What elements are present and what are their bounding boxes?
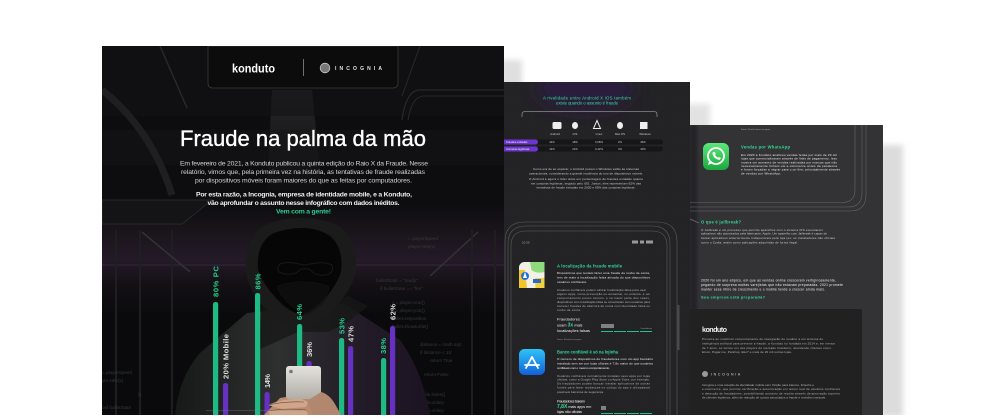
table: fraud by operating system: Mac OS [615, 132, 625, 136]
background: server corridor: return True [430, 358, 453, 363]
Incognia logo and text: e-commerce, que permite verificação e autenticação em tempo real de usuários confiáveis [702, 387, 840, 391]
table: fraud by operating system: 21% [572, 147, 578, 151]
section: fake locations: comportamento pouco comum, e na maior parte dos casos, [557, 296, 650, 300]
table: fraud by operating system: 36% [640, 140, 646, 144]
Konduto logo and text: Elomi, Pagar.me, Petshop, Eko? e mais de 20 mil outras lojas. [702, 350, 792, 354]
highlighted text: Por esta razão, a Incognia, empresa de identidade mobile, e a Konduto, [196, 192, 412, 198]
section: trusted bank: 7,8X mais apps em [557, 404, 591, 410]
header: logos: INCOGNIA [335, 66, 382, 72]
section: trusted bank: O número de dispositivos de fraudadores com um app bancário [557, 357, 653, 361]
background: server corridor: bulletState = "ready" [376, 278, 418, 283]
section: WhatsApp sales: de vendas por WhatsApp. [741, 172, 781, 176]
heading: rivalry: existe quando o assunto é fraude [556, 100, 619, 106]
bar labels: 14% [263, 374, 272, 388]
icon: app store [519, 349, 545, 375]
section: WhatsApp sales: Em 2020 a Konduto analisou vendas feitas por mais de 20 mil [741, 153, 837, 157]
background: server corridor: = playerSpeed [408, 236, 438, 241]
section: trusted bank: Usuários confiáveis normalmente instalam seus apps por lojas [557, 374, 651, 378]
Incognia logo and text: e detecção de fraudadores, possibilitando aumento de receita através da aprovação superior [702, 392, 840, 396]
section: fake locations: dispositivos com localização falsa se conectaram com usuários para [557, 300, 650, 304]
bar labels: 53% [338, 318, 346, 334]
bar labels: 62% [388, 304, 398, 320]
table: fraud by operating system: 41% [549, 147, 555, 151]
section: WhatsApp sales: Vendas por WhatsApp [741, 144, 790, 150]
bar labels: 36% [305, 342, 314, 357]
table: fraud by operating system: 18% [572, 140, 578, 144]
text block: closing [701, 278, 843, 300]
Incognia logo and text: INCOGNIA [711, 372, 742, 376]
text block: closing: pegando de surpresa muitas varejistas que não estavam preparadas. 2021 promete [701, 283, 843, 287]
panel: cover page [102, 46, 504, 415]
section: WhatsApp sales: mostra um aumento de vendas realizadas por marcas que não [741, 160, 837, 164]
phone outline bottom [690, 125, 866, 211]
section: WhatsApp sales: lojas que comercializaram através de links de pagamento. Isso [741, 156, 837, 160]
table: fraud by operating system: 44% [549, 140, 555, 144]
section: trusted bank: oficiais, como a Google Play Store ou Apple Store, por exemplo. [557, 378, 650, 382]
green bars [213, 293, 386, 415]
table: fraud by operating system: iOS [573, 132, 577, 136]
text block: closing: 2020 foi um ano atípico, em que as vendas online cresceram vertiginosamente, [701, 278, 836, 282]
Konduto logo and text: de 7 anos, se tornou um dos players do mercado brasileiro, atendendo clientes como [702, 346, 831, 350]
Incognia logo and text [702, 371, 840, 400]
Konduto logo and text: konduto [702, 325, 728, 334]
OS icons [552, 120, 648, 129]
background: server corridor: turtle.onkey [420, 408, 444, 413]
phone status bar [522, 240, 653, 244]
section: trusted bank: Banco confiável é só na lojinha [557, 350, 619, 354]
section: fake locations: Fraudadores [641, 328, 652, 330]
background: server corridor: turtle.listen() [420, 392, 446, 397]
section: fake locations: localizações falsas [557, 328, 590, 333]
intro text: por dispositivos móveis foram maiores do que as feitas por computadores. [195, 178, 412, 184]
highlighted text: vão aprofundar o assunto nesse infográfico com dados inéditos. [208, 200, 400, 207]
text block: Android commentary: O Android é agora o líder tanto em porcentagem de fraudes evitadas quanto [529, 177, 643, 181]
Incognia logo and text: de clientes legítimos, além de redução de custos associados a fraude e revisões manuais. [702, 396, 826, 400]
background: server corridor: ool bulletState [102, 405, 132, 410]
text block: Android commentary: operacionais, considerando a grande incidência do uso de dispositivos móveis. [529, 172, 643, 176]
text block: closing: manter esse ritmo de crescimento e o mobile tende a crescer ainda mais. [701, 288, 825, 292]
background: server corridor [102, 46, 504, 415]
section: trusted bank: instalado sem ser por lojas oficiais é 7,8x maior do que usuários [557, 362, 653, 366]
table: fraud by operating system: 4% [618, 147, 623, 151]
section: WhatsApp sales: necessariamente tinham um e-commerce antes da pandemia [741, 164, 837, 168]
phone outline [505, 222, 678, 415]
text block: Android commentary: em compras legítimas, seguido pelo iOS. Juntos, eles representam 62% das [531, 182, 642, 186]
background: server corridor: if distance < 15: [420, 350, 452, 355]
section: fake locations: A localização da fraude mobile [557, 264, 623, 268]
icon: WhatsApp [703, 143, 729, 170]
bar chart: PC vs mobile fraud [212, 265, 398, 415]
section: trusted bank: possíveis barreiras de segurança. [557, 390, 604, 394]
panel: middle page, Android vs iOS and phone [500, 64, 690, 415]
background: server corridor: bullet.setposition [392, 316, 427, 321]
section: jailbreak: O Jailbreak é um processo que permite aparelhos com o sistema iOS executarem [701, 228, 824, 232]
background: server corridor: if bulletState == "fire" [380, 286, 423, 291]
phone and hands [206, 366, 341, 415]
background: server corridor: player.setx(x) [408, 244, 436, 249]
text block: Android commentary: tentativas de fraude evitadas em 2020 e 65% das compras legítimas. [536, 186, 636, 190]
heading: rivalry: A rivalidade entre Android X iOS também [543, 96, 631, 100]
section: fake locations: Usuários confiáveis podem utilizar localização falsa para usar [557, 288, 646, 292]
background: server corridor: y = player.ycor() [392, 308, 425, 313]
background: server corridor: = playerSpeed [102, 370, 132, 375]
header: logos: konduto [232, 62, 275, 76]
section: WhatsApp sales: e foram forçadas a migrar para o on-line, principalmente através [741, 168, 840, 172]
section: trusted bank: fontes para fazer mudanças no código do app e ultrapassar [557, 386, 650, 390]
text block: Android commentary [529, 167, 643, 190]
section: jailbreak: aplicativos não autorizados pela fabricante, Apple. Um aparelho com Jailbreak é capaz de [701, 232, 827, 236]
section: fake locations: roubo de conta. [557, 308, 581, 312]
purple bars [223, 326, 395, 415]
bar labels: 47% [346, 326, 356, 342]
bar labels: 38% [379, 338, 388, 354]
section: trusted bank: confiáveis com o mesmo comportamento. [557, 366, 610, 370]
header: logos [208, 46, 398, 88]
text block: Android commentary: Como era de se esperar, o Android possui o Windows estão as sistemas [533, 167, 640, 171]
card: company descriptions [690, 309, 862, 415]
section: jailbreak [690, 219, 836, 244]
hooded figure photo [175, 218, 430, 415]
intro text [180, 160, 428, 184]
table: fraud by operating system [500, 112, 663, 152]
table: fraud by operating system: Linux [596, 132, 603, 136]
section: WhatsApp sales [741, 144, 840, 176]
section: fake locations: Fraudadores [557, 316, 580, 322]
table: fraud by operating system: 2% [618, 140, 623, 144]
section: trusted bank: lojas não oficiais [557, 410, 582, 414]
section: jailbreak: como o Cydia, assim como aplicações adquiridas de forma ilegal. [701, 240, 798, 244]
phone status bar: 10:30 [522, 240, 530, 244]
table: fraud by operating system: Android [550, 132, 560, 136]
icon: maps app [519, 262, 544, 288]
panel: right page, WhatsApp, jailbreak and companies [690, 125, 883, 415]
table: fraud by operating system: Compras legítimas [506, 147, 530, 151]
bar labels: 20% Mobile [222, 334, 230, 379]
section: fake locations [557, 264, 652, 341]
section: jailbreak: baixar aplicativos anteriormente indisponíveis pela loja (ex: os instaladores não oficiais [701, 236, 836, 240]
background: server corridor: yer.setx(x) [102, 378, 124, 383]
table: fraud by operating system: Windows [639, 132, 651, 136]
page shadows [500, 60, 903, 417]
title: Fraude na palma da mão [180, 126, 426, 151]
section: fake locations: Dispositivos que tentam fazer uma fraude de roubo de conta, [557, 271, 650, 275]
table: fraud by operating system: 33% [640, 147, 646, 151]
Incognia logo and text: Incognia é uma solução de identidade mobile sem fricção para bancos, fintechs e [702, 383, 814, 387]
Konduto logo and text: inteligência artificial para prevenir a fraude, a Konduto foi fundada em 2014 e, em menos [702, 342, 836, 346]
table: fraud by operating system: 0,08% [595, 140, 603, 144]
highlighted text [196, 192, 412, 216]
intro text: relatório, vimos que, pela primeira vez na história, as tentativas de fraude realizadas [181, 169, 426, 176]
bar labels: 64% [295, 304, 304, 320]
section: fake locations: usam 3x mais [557, 322, 583, 328]
background: server corridor: return False [424, 372, 449, 377]
heading: rivalry [543, 96, 631, 106]
section: jailbreak: O que é jailbreak? [701, 220, 741, 224]
section: fake locations: tem de mais a localização falsa ativada do que dispositivos [557, 276, 650, 280]
section: trusted bank: Fraudadores baixam [557, 400, 585, 404]
section: fake locations: alguns apps, como prevenção ou aumentar, no entanto, é um [557, 292, 651, 296]
section: fake locations: usuários confiáveis. [557, 280, 587, 284]
section: fake locations: Fonte: Relatório Incognia [557, 338, 582, 341]
background: server corridor: bullet.showturtle() [392, 324, 429, 329]
bar labels [212, 265, 398, 388]
background: server corridor: x = player.xcor() [392, 300, 425, 305]
table: fraud by operating system: 0,42% [595, 147, 603, 151]
highlighted text: Vem com a gente! [276, 208, 331, 216]
panel: right page, WhatsApp, jailbreak and companies: Fonte: Painel Interno Incognia [741, 128, 771, 131]
bar labels: 80% PC [212, 265, 220, 297]
Konduto logo and text: Pioneira ao combinar comportamento de navegação do usuário a um sistema de [702, 337, 823, 341]
table: fraud by operating system: Fraudes evitadas [506, 140, 528, 144]
section: trusted bank [557, 350, 653, 414]
section: fake locations: cometer fraudes de abertura de conta com identidade falsa ou [557, 304, 650, 308]
section: trusted bank: Os fraudadores podem buscar instalar aplicativos de outras [557, 382, 651, 386]
background: server corridor: turtle.onkey [420, 400, 444, 405]
text block: closing: Sua empresa está preparada? [701, 294, 766, 300]
bar labels: 86% [254, 273, 262, 290]
intro text: Em fevereiro de 2021, a Konduto publicou a quinta edição do Raio X da Fraude. Nesse [180, 160, 428, 168]
background: server corridor: distance = math.sqrt [420, 342, 462, 347]
Konduto logo and text [702, 325, 836, 354]
background: server corridor: (): [138, 392, 142, 397]
